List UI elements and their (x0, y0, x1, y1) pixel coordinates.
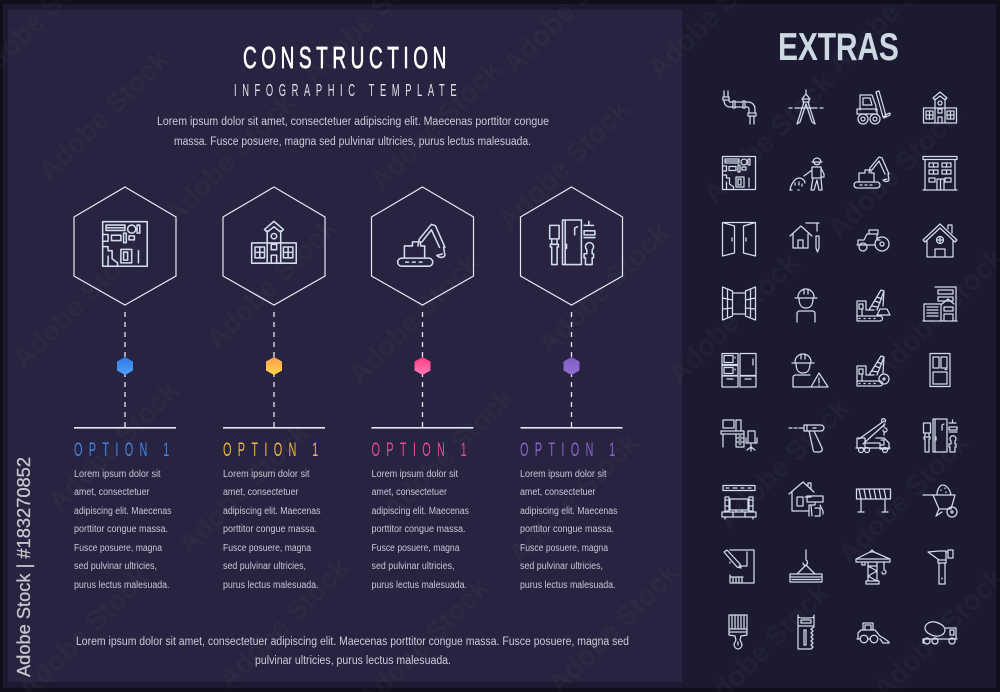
icon: crane truck (856, 419, 890, 452)
marker dot 2 (266, 357, 282, 375)
option text 4: amet, consectetuer (520, 487, 596, 498)
icon: house painting (789, 482, 823, 516)
icon: apartment building (923, 156, 957, 190)
option text 1: purus lectus malesuada. (74, 580, 170, 591)
icon: house and pencil (790, 223, 819, 252)
dashed connector 1 (124, 312, 126, 427)
icon: computer desk (721, 420, 757, 451)
option text 1 (74, 469, 172, 591)
icon: power drill (789, 425, 824, 452)
watermark pattern: Adobe Stock (492, 94, 635, 237)
option heading 2: OPTION 1 (223, 440, 318, 461)
option text 1: Lorem ipsum dolor sit (74, 469, 161, 480)
option text 1: sed pulvinar ultricies, (74, 561, 157, 572)
option text 3: Fusce posuere, magna (372, 543, 460, 554)
option text 1: adipiscing elit. Maecenas (74, 506, 172, 517)
option text 4 (520, 469, 618, 591)
watermark pattern: Adobe Stock (697, 67, 840, 210)
hexagon 4 with bathroom icon (520, 187, 622, 305)
watermark pattern: Adobe Stock (7, 232, 150, 375)
option text 3: amet, consectetuer (372, 487, 448, 498)
extras icon grid (721, 90, 957, 649)
icon: hammer (928, 550, 953, 584)
option column 2 (223, 187, 325, 591)
icon: road roller (857, 230, 889, 251)
rule 3 (372, 427, 474, 429)
option text 4: adipiscing elit. Maecenas (520, 506, 618, 517)
option text 2: adipiscing elit. Maecenas (223, 506, 320, 517)
dashed connector 3 (422, 312, 424, 427)
option text 4: porttitor congue massa. (520, 524, 614, 535)
option text 4: Fusce posuere, magna (520, 543, 608, 554)
marker dot 1 (117, 357, 133, 375)
marker dot 4 (564, 357, 580, 375)
intro text: Lorem ipsum dolor sit amet, consectetuer adipiscing elit. Maecenas porttitor congue (157, 116, 549, 128)
option heading 3: OPTION 1 (372, 440, 467, 461)
icon: road barrier (856, 489, 890, 512)
watermark pattern: Adobe Stock (342, 247, 485, 390)
icon: pipe (723, 91, 756, 124)
icon: paint brush (729, 615, 747, 649)
subtitle: INFOGRAPHIC TEMPLATE (234, 81, 457, 101)
footer text: pulvinar ultricies, purus lectus malesuada. (255, 655, 451, 667)
icon: double doors (722, 222, 756, 256)
watermark pattern: Adobe Stock (172, 417, 315, 560)
option text 4: sed pulvinar ultricies, (520, 561, 603, 572)
icon: kitchen cabinets (722, 354, 756, 387)
watermark pattern: Adobe Stock (377, 382, 520, 525)
option text 4: purus lectus malesuada. (520, 580, 616, 591)
watermark pattern: Adobe Stock (158, 87, 301, 230)
icon: door (930, 354, 950, 386)
watermark pattern: Adobe Stock (502, 427, 645, 570)
icon: drafting compass (789, 90, 823, 124)
watermark pattern: Adobe Stock (532, 217, 675, 360)
option text 2: Lorem ipsum dolor sit (223, 469, 310, 480)
footer text: Lorem ipsum dolor sit amet, consectetuer adipiscing elit. Maecenas porttitor congue massa. Fusce posuere, magna sed (76, 636, 629, 648)
icon: entertainment unit (722, 486, 756, 519)
icon: wrecking ball crane (857, 356, 889, 386)
option column 3 (372, 187, 474, 591)
icon: school (924, 92, 956, 123)
icon: crawler crane (857, 290, 890, 321)
option text 1: porttitor congue massa. (74, 524, 168, 535)
icon: blueprint and pencil (724, 550, 754, 583)
marker dot 3 (414, 357, 430, 375)
watermark pattern: Adobe Stock (32, 44, 175, 187)
dashed connector 4 (570, 312, 572, 427)
intro text (157, 116, 549, 148)
watermark pattern: Adobe Stock (42, 375, 185, 518)
option text 3: porttitor congue massa. (372, 524, 466, 535)
icon: forklift (857, 91, 890, 124)
icon: floor plan (722, 156, 756, 190)
option text 1: Fusce posuere, magna (74, 543, 162, 554)
option text 2 (223, 469, 320, 591)
hexagon 1 with plan icon (74, 187, 176, 305)
icon: office buildings (923, 287, 957, 321)
option text 1: amet, consectetuer (74, 487, 150, 498)
watermark pattern: Adobe Stock (200, 212, 343, 355)
option text 3: Lorem ipsum dolor sit (372, 469, 458, 480)
icon: open window (722, 287, 756, 320)
stock id vertical label: Adobe Stock | #183270852 (13, 457, 34, 677)
icon: tower crane (856, 550, 890, 584)
rule 1 (74, 427, 176, 429)
icon: cement mixer (923, 622, 957, 644)
hexagon 2 with school icon (223, 187, 325, 305)
hexagon 3 with excavator icon (372, 187, 474, 305)
option column 1 (74, 187, 176, 591)
extras heading: EXTRAS (778, 25, 899, 69)
watermark pattern: Adobe Stock (364, 54, 507, 197)
option text 3: adipiscing elit. Maecenas (372, 506, 469, 517)
option text 3 (372, 469, 469, 591)
option column 4 (520, 187, 622, 591)
icon: worker with hard hat (795, 289, 817, 322)
title: CONSTRUCTION (243, 42, 446, 75)
dashed connector 2 (273, 312, 275, 427)
watermark pattern: Adobe Stock (832, 427, 975, 570)
intro text: massa. Fusce posuere, magna sed pulvinar ultricies, purus lectus malesuada. (174, 136, 531, 148)
option text 2: sed pulvinar ultricies, (223, 561, 306, 572)
icon: hand saw (798, 615, 814, 649)
panel: main infographic background (8, 10, 682, 682)
rule 2 (223, 427, 325, 429)
option text 2: porttitor congue massa. (223, 524, 317, 535)
icon: house (923, 224, 957, 257)
option text 3: purus lectus malesuada. (372, 580, 467, 591)
option text 2: amet, consectetuer (223, 487, 299, 498)
watermark pattern: Adobe Stock (662, 247, 805, 390)
option text 2: purus lectus malesuada. (223, 580, 318, 591)
option text 3: sed pulvinar ultricies, (372, 561, 454, 572)
icon: digging worker (790, 158, 824, 190)
watermark pattern: Adobe Stock (822, 102, 965, 245)
icon: excavator (854, 157, 889, 188)
footer text (76, 636, 629, 667)
rule 4 (520, 427, 622, 429)
watermark pattern: Adobe Stock (212, 552, 355, 692)
option text 4: Lorem ipsum dolor sit (520, 469, 607, 480)
watermark pattern: Adobe Stock (712, 392, 855, 535)
option text 2: Fusce posuere, magna (223, 543, 311, 554)
icon: bathroom fixtures (924, 419, 957, 452)
icon: worker warning (792, 354, 828, 387)
option heading 1: OPTION 1 (74, 440, 169, 461)
icon: wheelbarrow (923, 485, 957, 517)
option heading 4: OPTION 1 (520, 440, 615, 461)
icon: hook and beam (790, 550, 822, 582)
icon: loader (857, 623, 889, 643)
